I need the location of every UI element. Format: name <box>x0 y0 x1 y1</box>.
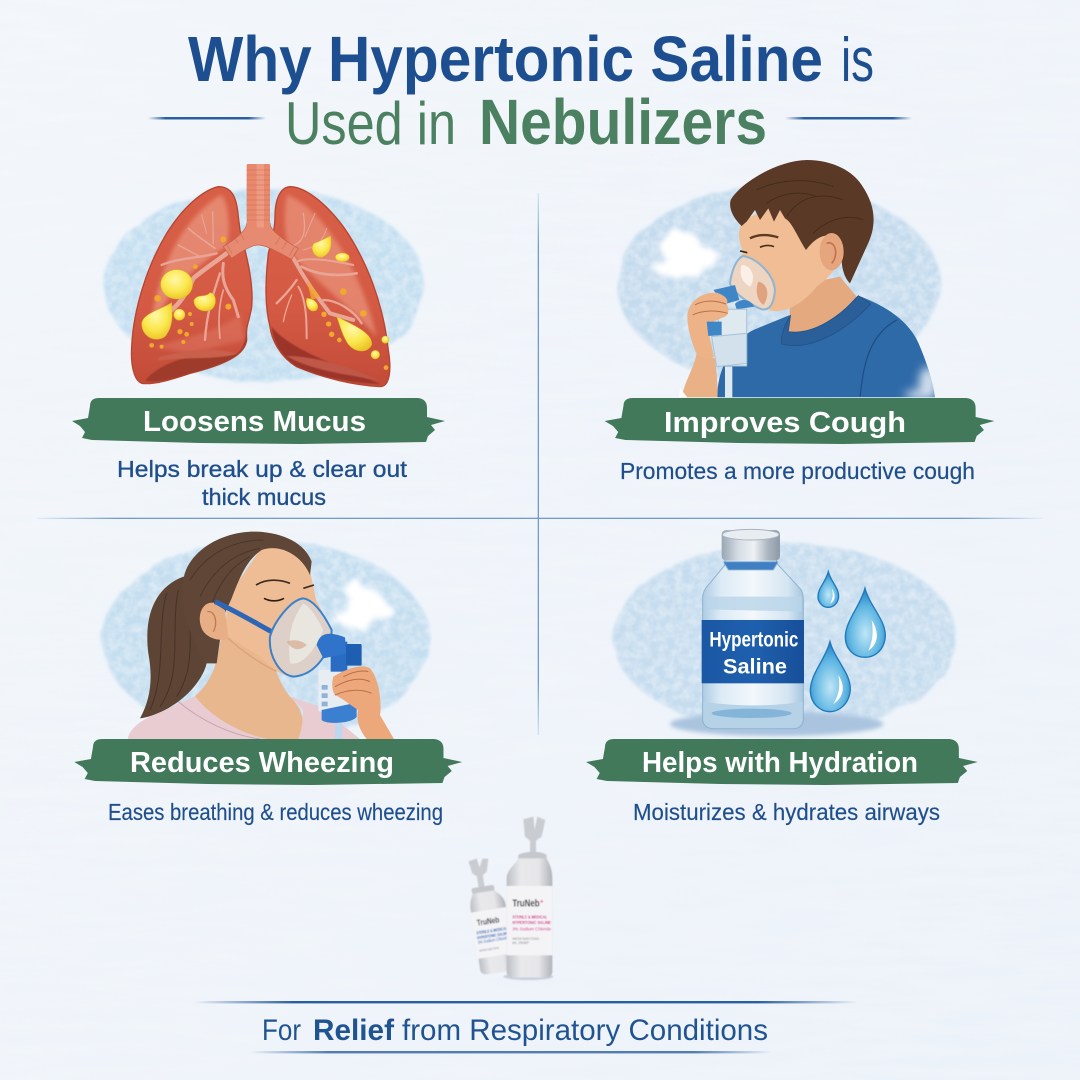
banner: reduces wheezing: Reduces Wheezing <box>130 747 394 779</box>
mask <box>730 256 775 309</box>
panel: loosens mucus <box>72 164 445 510</box>
steam cloud <box>653 230 718 277</box>
text: improves cough description: Promotes a more productive cough <box>620 458 975 484</box>
large bottle: WATER INJECTIONS <box>512 937 540 941</box>
footer tagline <box>193 1001 858 1053</box>
water drops <box>810 572 885 712</box>
shirt <box>717 296 935 397</box>
title: Nebulizers <box>479 86 767 158</box>
background blob: woman <box>102 540 430 740</box>
eye and brow <box>256 580 290 585</box>
panel: helps with hydration <box>586 529 978 825</box>
mask <box>270 598 332 677</box>
product: TruNeb bottles <box>463 817 553 980</box>
footer tagline: For <box>262 1014 301 1047</box>
illustration: saline bottle and drops <box>670 529 885 736</box>
nebulizer <box>713 285 739 304</box>
strap <box>215 602 272 632</box>
ponytail <box>140 577 207 718</box>
small bottle: STERILE & MEDICAL <box>476 926 508 936</box>
icon: lungs with mucus <box>131 164 390 387</box>
ear <box>820 233 844 270</box>
mucus <box>142 236 389 359</box>
collar <box>781 296 871 346</box>
hair <box>730 160 874 283</box>
shirt <box>128 696 360 739</box>
text: reduces wheezing description: Eases breathing & reduces wheezing <box>108 799 443 825</box>
small bottle <box>463 855 516 975</box>
large bottle: TruNeb <box>512 899 540 910</box>
title: Why Hypertonic Saline <box>188 23 823 95</box>
text: hydration description: Moisturizes & hydrates airways <box>633 799 940 825</box>
text: loosens mucus description: Helps break up & clear out <box>117 456 408 482</box>
face <box>739 205 841 311</box>
background blob: boy <box>617 185 941 385</box>
large bottle: ML 250BP <box>512 941 530 945</box>
banner: loosens mucus <box>72 398 445 444</box>
small bottle: 3% Sodium Chloride <box>478 935 510 945</box>
text: loosens mucus description <box>117 456 408 510</box>
large bottle <box>507 817 552 978</box>
banner: helps with hydration <box>586 739 978 785</box>
steam cloud <box>328 578 395 629</box>
banner: loosens mucus: Loosens Mucus <box>143 406 366 438</box>
eye and brow <box>750 235 778 238</box>
banner: reduces wheezing <box>74 739 462 785</box>
small bottle: WATER INJECTIONS <box>479 946 499 953</box>
banner: improves cough: Improves Cough <box>664 407 906 439</box>
neck and chest <box>195 630 302 739</box>
title <box>148 23 912 158</box>
illustration: boy with nebulizer <box>653 160 938 400</box>
bottle: Hypertonic <box>709 627 798 652</box>
title: is <box>841 26 874 95</box>
large bottle: STERILE & MEDICAL <box>512 914 547 920</box>
ear <box>200 603 228 640</box>
text: loosens mucus description: thick mucus <box>202 484 326 510</box>
illustration: woman with mask <box>128 532 395 739</box>
hand and arm <box>682 353 718 397</box>
trachea <box>223 223 298 259</box>
large bottle: 3% Sodium Chloride <box>512 927 551 933</box>
background blob: bottle <box>613 543 957 733</box>
large bottle: HYPERTONIC SALINE <box>512 920 551 926</box>
title: Used in <box>285 90 456 157</box>
panel: reduces wheezing <box>74 532 462 825</box>
bottle: Saline <box>723 653 787 678</box>
bottle <box>702 529 804 729</box>
footer tagline: from Respiratory Conditions <box>402 1014 768 1047</box>
small bottle: TruNeb <box>476 914 500 928</box>
large bottle: + <box>540 899 544 905</box>
small bottle: HYPERTONIC SALINE <box>477 930 509 940</box>
banner: helps with hydration: Helps with Hydration <box>642 747 918 779</box>
footer tagline: Relief <box>313 1014 395 1047</box>
neck <box>788 277 857 334</box>
hair top <box>183 532 312 663</box>
face <box>223 547 332 677</box>
panel: improves cough <box>605 160 994 484</box>
hand <box>332 666 394 739</box>
background blob: lungs <box>104 188 424 382</box>
nebulizer <box>318 670 355 712</box>
banner: improves cough <box>605 398 994 444</box>
